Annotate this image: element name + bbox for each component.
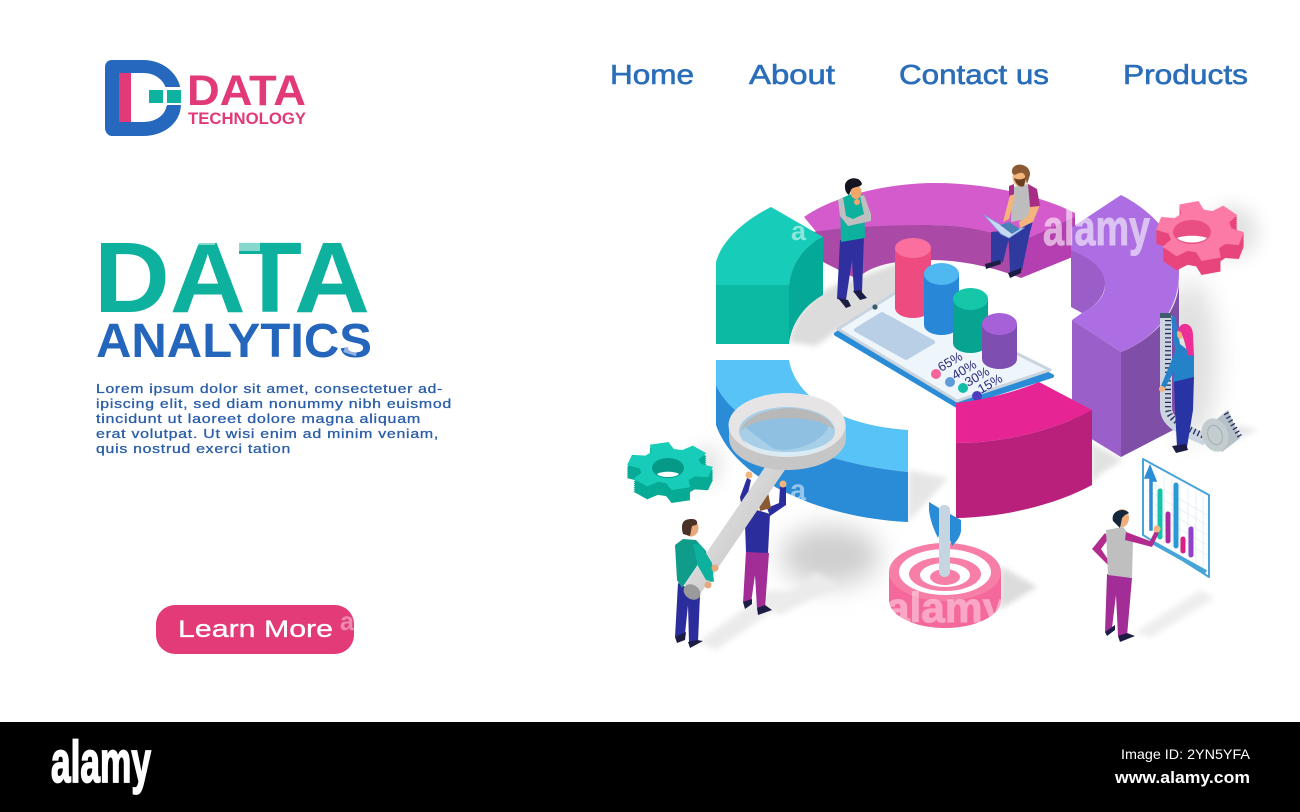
button: Learn More: a	[340, 606, 355, 636]
navigation: Contact us	[899, 59, 1049, 90]
phone	[836, 293, 1052, 406]
body text: erat volutpat. Ut wisi enim ad minim veniam,	[96, 426, 439, 441]
icon: D monogram	[105, 60, 181, 136]
chart: magenta ring segment	[956, 382, 1092, 518]
chart: purple ring segment	[1071, 195, 1179, 457]
icon: target with arrow: alamy	[886, 584, 1007, 631]
icon: target with arrow	[886, 502, 1007, 631]
navigation	[610, 59, 1248, 90]
navigation: Home	[610, 59, 694, 90]
arrow shaft and fins	[929, 502, 961, 577]
phone legend: 30%	[962, 363, 992, 390]
heading: ANALYTICS: ANALYTICS	[96, 315, 372, 368]
person: woman measuring and tape	[1159, 313, 1240, 455]
body text: tincidunt ut laoreet dolore magna aliquam	[96, 411, 421, 426]
phone screen card	[856, 314, 933, 358]
bar chart cylinders	[895, 238, 1017, 369]
footer bar	[0, 722, 1300, 812]
watermark: alamy	[1043, 200, 1150, 256]
heading	[94, 222, 372, 368]
footer image id: Image ID: 2YN5YFA	[1121, 746, 1251, 762]
body text	[96, 381, 452, 456]
ground shadows	[696, 206, 1258, 650]
chart: teal ring segment: a	[791, 216, 807, 246]
body text: quis nostrud exerci tation	[96, 441, 291, 456]
icon: teal gear	[619, 438, 721, 507]
button: Learn More: Learn More	[178, 616, 333, 643]
person: thinking man	[837, 178, 871, 308]
button: Learn More	[156, 605, 355, 654]
tape measure	[1160, 313, 1240, 455]
navigation: About	[749, 59, 835, 90]
chart: blue ring segment	[716, 360, 908, 522]
chart board bars	[1160, 485, 1191, 555]
footer url: www.alamy.com	[1114, 768, 1250, 787]
body text: ipiscing elit, sed diam nonummy nibh euismod	[96, 396, 452, 411]
person: man carrying magnifier	[675, 519, 712, 648]
phone legend: 15%	[975, 370, 1005, 397]
heading: DATA: DATA	[94, 222, 370, 334]
phone legend	[931, 348, 1005, 401]
icon: magnifying glass	[681, 393, 846, 603]
chart board arrow	[1145, 466, 1156, 530]
footer logo: alamy	[51, 730, 151, 795]
person: man with laptop	[984, 165, 1040, 278]
icon: pink gear	[1148, 196, 1252, 280]
man carrying magnifier: arm and hand in front	[693, 544, 718, 588]
navigation: Products	[1123, 59, 1248, 90]
phone legend: 40%	[949, 356, 979, 383]
person: man holding magnifier up	[740, 472, 786, 615]
logo wordmark: DATA	[187, 67, 306, 115]
logo wordmark: TECHNOLOGY	[188, 109, 307, 128]
logo	[105, 60, 307, 136]
chart: blue ring segment: a	[790, 474, 806, 507]
chart: teal ring segment	[716, 207, 823, 344]
chart board	[1143, 459, 1209, 577]
phone legend: 65%	[935, 348, 965, 375]
chart: back magenta ring segment	[804, 183, 1075, 279]
person: man presenting chart	[1092, 509, 1160, 642]
body text: Lorem ipsum dolor sit amet, consectetuer ad-	[96, 381, 443, 396]
